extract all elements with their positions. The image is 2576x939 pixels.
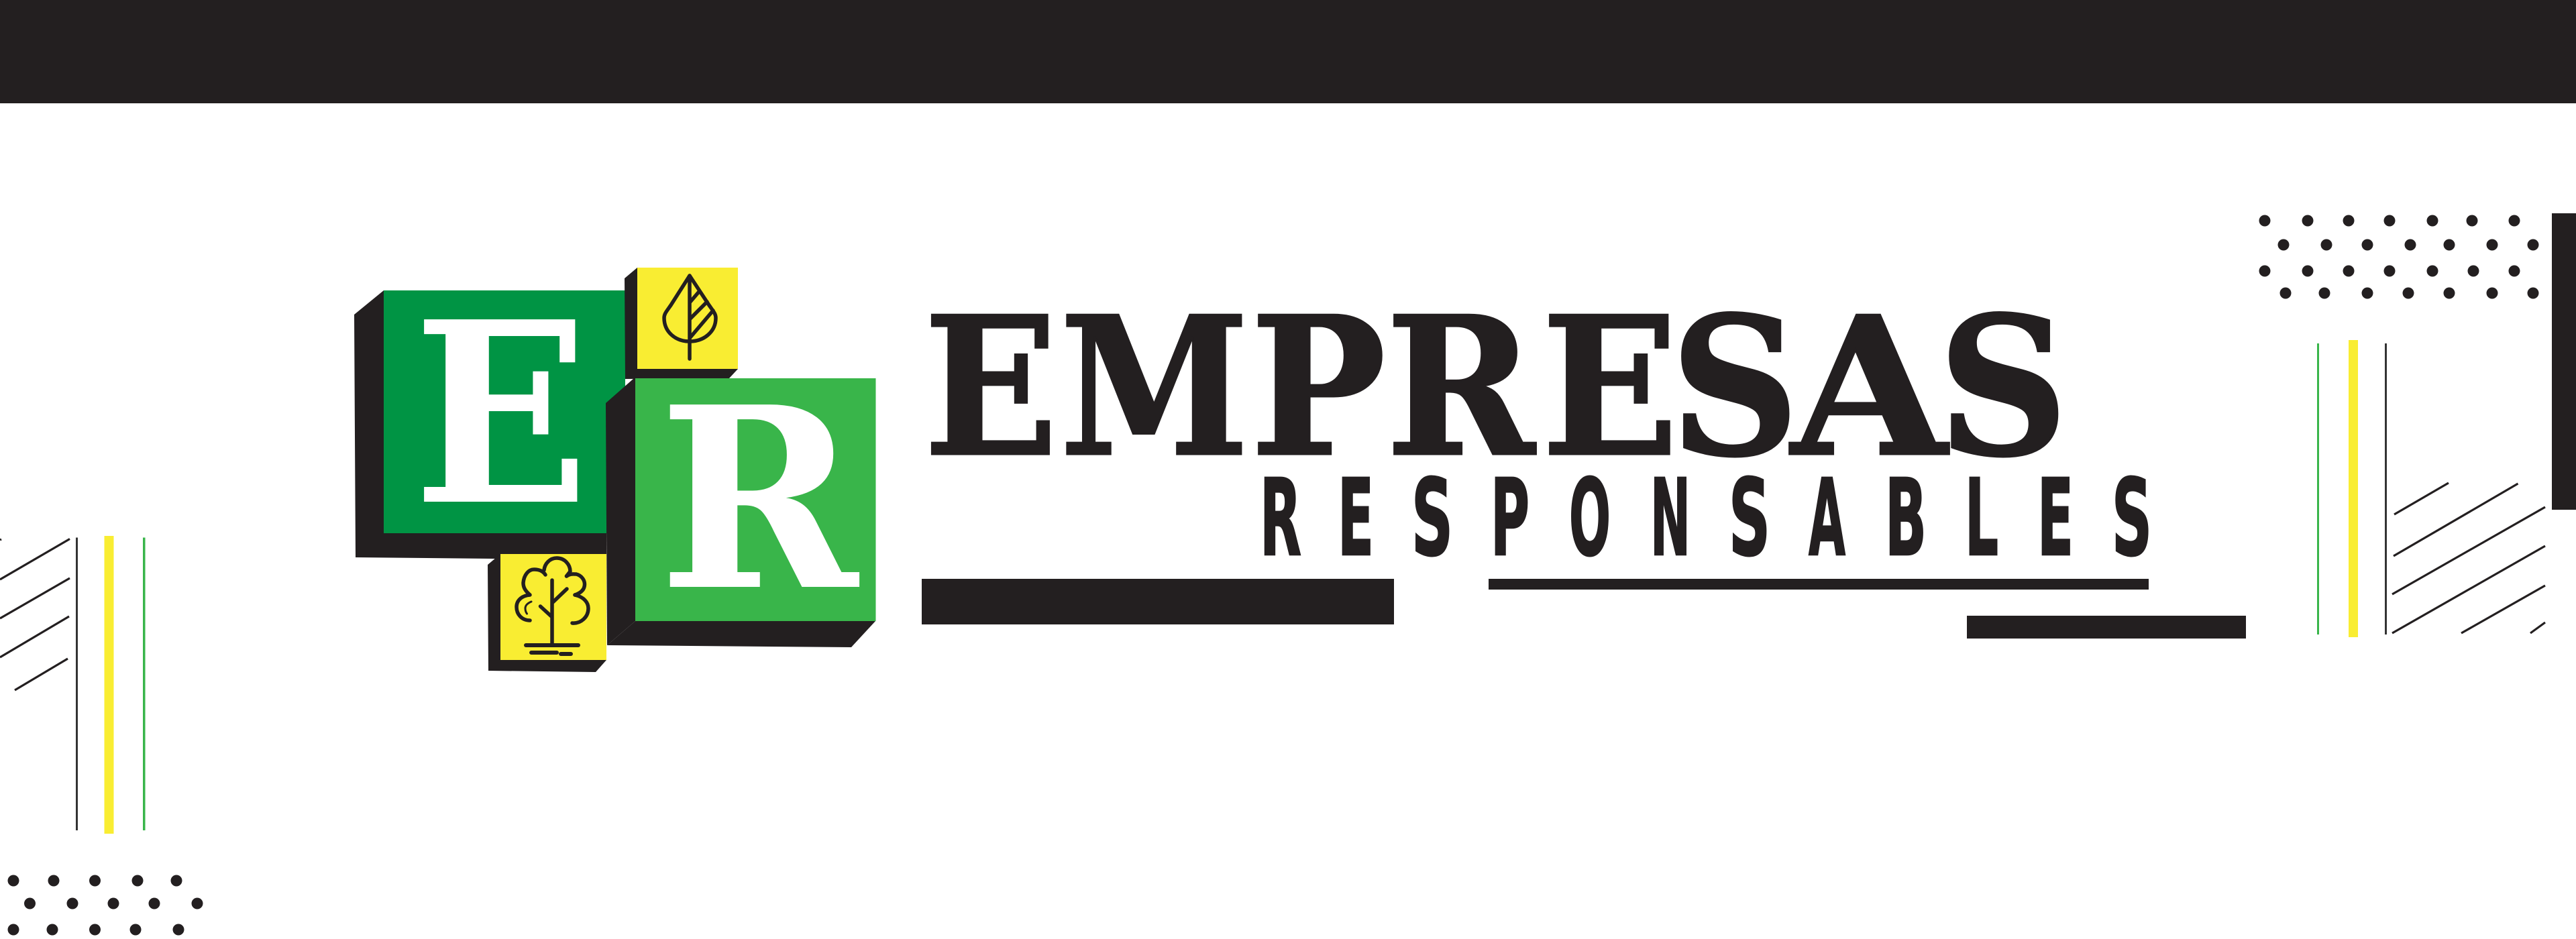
subtitle: RESPONSABLES — [1260, 457, 2152, 580]
right black vertical bar — [2552, 213, 2576, 510]
title: EMPRESAS: M — [1060, 275, 1249, 500]
block: letter R: R — [659, 352, 861, 646]
block: letter E: E — [413, 267, 589, 561]
subtitle: RESPONSABLES: A — [1809, 457, 1845, 580]
subtitle: RESPONSABLES: S — [1729, 457, 1770, 580]
title: EMPRESAS: E — [924, 275, 1058, 500]
subtitle: RESPONSABLES: N — [1650, 457, 1690, 580]
icon: tree — [517, 558, 588, 654]
title: EMPRESAS: E — [1542, 275, 1678, 500]
right vertical stripes — [2317, 340, 2387, 637]
title: EMPRESAS: S — [1938, 275, 2068, 500]
title: EMPRESAS — [924, 275, 2068, 500]
right dot pattern — [2259, 215, 2538, 299]
icon: leaf — [664, 276, 716, 359]
subtitle: RESPONSABLES: L — [1965, 457, 1998, 580]
right diagonal lines — [2392, 483, 2545, 633]
subtitle: RESPONSABLES: R — [1260, 457, 1301, 580]
title: EMPRESAS: P — [1250, 275, 1386, 500]
title: EMPRESAS: R — [1386, 275, 1537, 500]
top black band — [0, 0, 2576, 103]
subtitle: RESPONSABLES: O — [1569, 457, 1611, 580]
subtitle: RESPONSABLES: E — [2037, 457, 2074, 580]
logo ER — [354, 267, 876, 672]
left vertical stripes — [76, 536, 145, 834]
black bars under title — [922, 579, 2246, 639]
subtitle: RESPONSABLES: E — [1338, 457, 1374, 580]
title: EMPRESAS: S — [1670, 275, 1799, 500]
left diagonal lines — [0, 539, 70, 690]
title: EMPRESAS: A — [1788, 275, 1951, 500]
left dot pattern — [8, 875, 203, 935]
subtitle: RESPONSABLES: S — [1411, 457, 1453, 580]
block: yellow leaf tile — [625, 268, 738, 379]
subtitle: RESPONSABLES: B — [1885, 457, 1927, 580]
block: yellow tree tile — [488, 554, 606, 672]
subtitle: RESPONSABLES: S — [2112, 457, 2152, 580]
subtitle: RESPONSABLES: P — [1491, 457, 1529, 580]
